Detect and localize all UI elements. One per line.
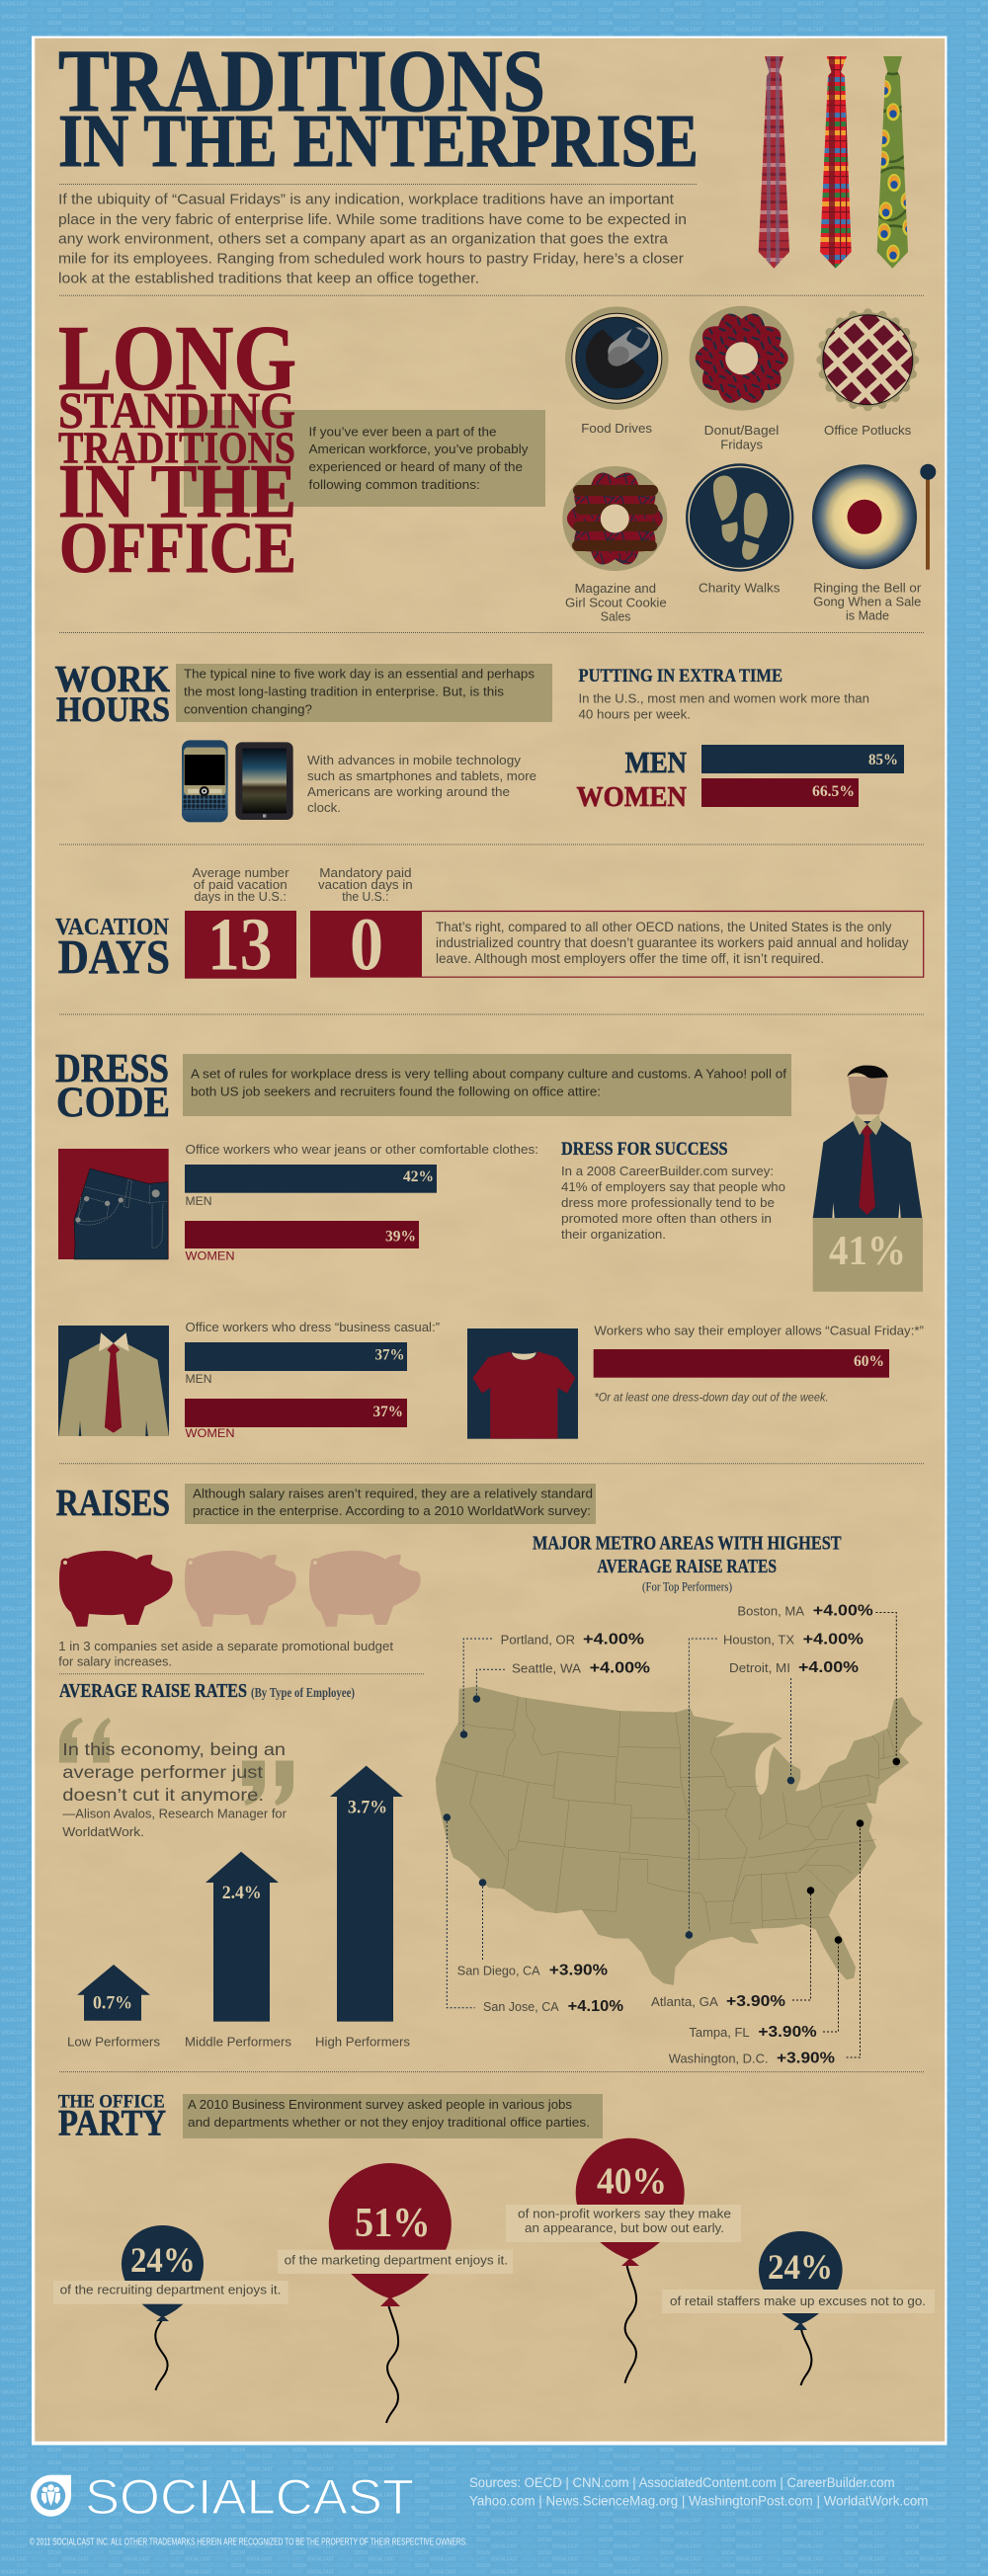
label: low performers: Low Performers <box>67 2035 160 2049</box>
caption: magazine and girl scout cookie sales: Sales <box>601 608 631 624</box>
intro text: If the ubiquity of “Casual Fridays” is any indication, workplace traditions have an important <box>58 192 675 207</box>
outlined vacation text <box>422 911 924 977</box>
heading: long standing traditions in the office: OFFICE <box>59 508 296 588</box>
heading: long standing traditions in the office <box>58 307 296 588</box>
map label: portland <box>501 1632 644 1648</box>
map label: detroit <box>729 1659 859 1676</box>
bar: women 66.5%: 66.5% <box>812 783 855 800</box>
bar: men 85% <box>701 745 904 773</box>
caption: average paid vacation days: Average number <box>192 865 289 880</box>
map label: boston: +4.00% <box>813 1602 873 1619</box>
map label: seattle: Seattle, WA <box>512 1662 582 1676</box>
label: women: WOMEN <box>186 1426 235 1440</box>
bar: women 37%: 37% <box>373 1404 403 1420</box>
stat box: 41% <box>813 1218 923 1292</box>
intro text <box>58 192 687 286</box>
socialcast logo icon <box>31 2475 71 2517</box>
icon: piggy bank faded <box>309 1551 421 1627</box>
map label: seattle <box>512 1660 650 1677</box>
map label: houston <box>723 1632 864 1648</box>
heading: major metro areas: MAJOR METRO AREAS WITH HIGHEST <box>533 1533 842 1555</box>
balloon: non-profit 40% <box>506 2138 741 2383</box>
caption: ringing the bell: is Made <box>846 608 889 623</box>
caption: magazine and girl scout cookie sales: Girl Scout Cookie <box>565 595 667 609</box>
map label: san diego <box>457 1963 608 1979</box>
map label: atlanta: +3.90% <box>726 1993 785 2010</box>
icon: piggy bank faded <box>185 1551 296 1627</box>
heading: major metro areas <box>533 1533 842 1594</box>
map label: washington: Washington, D.C. <box>669 2053 769 2066</box>
icon: gong <box>812 464 917 569</box>
intro text: look at the established traditions that keep an office together. <box>58 271 479 286</box>
icon: food drives can <box>565 306 669 410</box>
heading: work hours: WORK <box>55 659 170 700</box>
balloon: non-profit 40%: 40% <box>597 2161 667 2203</box>
bar: men 37% <box>185 1342 407 1371</box>
extra time text: In the U.S., most men and women work more than <box>579 691 869 706</box>
heading: raises: RAISES <box>56 1483 170 1524</box>
caption: mandatory paid vacation days <box>318 865 413 904</box>
heading: vacation days <box>55 914 170 984</box>
sources <box>469 2474 928 2509</box>
label: women: WOMEN <box>186 1248 235 1262</box>
icon: plaid red tie <box>759 56 789 269</box>
stat box: 0: 0 <box>350 904 383 987</box>
bar: men 37%: 37% <box>375 1347 405 1364</box>
title <box>58 33 699 183</box>
heading: dress code: DRESS <box>55 1045 169 1090</box>
jeans survey text: Office workers who wear jeans or other comfortable clothes: <box>186 1142 538 1157</box>
caption: office potlucks: Office Potlucks <box>824 423 912 438</box>
icon: t-shirt <box>467 1328 578 1439</box>
map label: detroit: +4.00% <box>798 1659 859 1676</box>
caption: mandatory paid vacation days: Mandatory paid <box>319 865 411 880</box>
heading: work hours <box>55 659 170 729</box>
balloon: marketing 51%: 51% <box>355 2201 431 2246</box>
work hours text box: The typical nine to five work day is an essential and perhaps <box>184 667 535 682</box>
bar: men 42% <box>185 1165 437 1193</box>
heading: putting in extra time: PUTTING IN EXTRA TIME <box>579 667 782 686</box>
map label: portland: Portland, OR <box>501 1634 575 1648</box>
map label: seattle: +4.00% <box>590 1660 650 1677</box>
arrow: high performers 3.7% <box>330 1766 403 2022</box>
balloon: recruiting 24% <box>53 2225 288 2390</box>
heading: dress code <box>55 1045 170 1126</box>
bar: casual friday 60%: 60% <box>854 1353 884 1370</box>
map label: atlanta <box>651 1993 785 2010</box>
heading: average raise rates: (By Type of Employee) <box>251 1686 355 1701</box>
dress for success text <box>561 1164 785 1242</box>
dress for success text: 41% of employers say that people who <box>561 1179 785 1194</box>
icon: tablet <box>235 742 293 820</box>
icon: peacock tie <box>877 56 908 269</box>
intro text: mile for its employees. Ranging from scheduled work hours to pastry Friday, here’s a closer <box>58 251 684 268</box>
long standing text box: American workforce, you’ve probably <box>308 442 529 456</box>
heading: vacation days: VACATION <box>55 914 169 940</box>
caption: donut bagel fridays: Fridays <box>720 437 763 451</box>
map label: portland: +4.00% <box>583 1632 644 1648</box>
long standing text box: If you’ve ever been a part of the <box>308 425 496 439</box>
work hours text box: the most long-lasting tradition in enterprise. But, is this <box>184 684 505 699</box>
label: middle performers: Middle Performers <box>185 2035 291 2049</box>
dress code text box: both US job seekers and recruiters found the following on office attire: <box>191 1085 601 1099</box>
mobile technology text: With advances in mobile technology <box>307 753 522 767</box>
arrow: middle performers 2.4%: 2.4% <box>222 1883 262 1903</box>
men label: MEN <box>625 746 687 779</box>
copyright: © 2011 SOCIALCAST INC. ALL OTHER TRADEMARKS HEREIN ARE RECOGNIZED TO BE THE PROPERTY OF THEIR RESPECTIVE OWNERS. <box>30 2537 467 2548</box>
outlined vacation text: That’s right, compared to all other OECD nations, the United States is the only <box>436 920 892 934</box>
map label: san jose <box>483 1998 623 2015</box>
heading: major metro areas: AVERAGE RAISE RATES <box>597 1556 777 1577</box>
intro text: place in the very fabric of enterprise life. While some traditions have come to be expected in <box>58 211 687 228</box>
outlined vacation text: leave. Although most employers offer the time off, it isn’t required. <box>436 951 824 966</box>
quote text <box>62 1739 287 1839</box>
mobile technology text: clock. <box>307 800 341 815</box>
dress for success text: their organization. <box>561 1227 666 1242</box>
sources: Yahoo.com | News.ScienceMag.org | WashingtonPost.com | WorldatWork.com <box>469 2493 928 2509</box>
icon: piggy bank highlighted <box>59 1551 173 1627</box>
caption: donut bagel fridays <box>704 423 779 451</box>
arrow: middle performers 2.4% <box>206 1852 279 2022</box>
heading: major metro areas: (For Top Performers) <box>642 1580 732 1594</box>
map label: boston <box>737 1602 873 1619</box>
quote text: average performer just <box>62 1762 263 1782</box>
icon: donut <box>690 306 794 411</box>
map label: atlanta: Atlanta, GA <box>651 1995 718 2009</box>
caption: ringing the bell: Gong When a Sale <box>813 595 921 609</box>
heading: dress code: CODE <box>56 1080 170 1126</box>
work hours text box: convention changing? <box>184 702 312 717</box>
long standing text box: experienced or heard of many of the <box>308 459 523 474</box>
label: men: MEN <box>186 1372 211 1386</box>
caption: average paid vacation days: days in the U.S.: <box>194 889 287 904</box>
label: high performers: High Performers <box>315 2035 410 2049</box>
heading: work hours: HOURS <box>56 689 170 729</box>
icon: footprints <box>686 463 793 572</box>
heading: long standing traditions in the office: TRADITIONS <box>58 423 295 472</box>
balloon: marketing 51%: of the marketing department enjoys it. <box>285 2253 508 2268</box>
title: IN THE ENTERPRISE <box>58 100 699 183</box>
map label: san diego: San Diego, CA <box>457 1965 540 1978</box>
label: men: MEN <box>186 1194 211 1208</box>
piggy bank caption: for salary increases. <box>58 1654 172 1668</box>
arrow: high performers 3.7%: 3.7% <box>348 1798 387 1817</box>
mobile technology text: Americans are working around the <box>307 784 510 799</box>
balloon: non-profit 40%: of non-profit workers say they make <box>518 2207 731 2221</box>
map label: boston: Boston, MA <box>737 1604 805 1618</box>
caption: ringing the bell <box>813 581 922 623</box>
casual friday text: Workers who say their employer allows “Casual Friday:*” <box>594 1324 924 1338</box>
office party text box: A 2010 Business Environment survey asked people in various jobs <box>188 2097 573 2112</box>
map label: tampa: Tampa, FL <box>689 2026 750 2040</box>
caption: average paid vacation days: of paid vacation <box>194 877 288 892</box>
balloon: retail 24%: of retail staffers make up excuses not to go. <box>670 2294 926 2308</box>
long standing text box <box>184 410 545 507</box>
heading: vacation days: DAYS <box>58 929 170 984</box>
arrow: low performers 0.7% <box>77 1965 150 2021</box>
heading: long standing traditions in the office: LONG <box>58 307 296 410</box>
icon: mallet <box>920 464 936 570</box>
bar: women 37% <box>185 1399 407 1427</box>
caption: donut bagel fridays: Donut/Bagel <box>704 423 779 438</box>
quote text: WorldatWork. <box>62 1825 144 1839</box>
heading: long standing traditions in the office: STANDING <box>58 383 295 440</box>
icon: smartphone <box>182 740 228 822</box>
caption: ringing the bell: Ringing the Bell or <box>813 581 922 595</box>
dress code text box: A set of rules for workplace dress is very telling about company culture and customs. A Yahoo! poll of <box>191 1067 786 1082</box>
icon: pie <box>820 312 915 407</box>
caption: food drives: Food Drives <box>581 421 653 436</box>
map: contiguous united states <box>436 1686 923 1985</box>
women label: WOMEN <box>577 781 687 813</box>
map label: tampa: +3.90% <box>758 2024 817 2041</box>
balloon: recruiting 24%: 24% <box>130 2240 196 2280</box>
dress for success text: In a 2008 CareerBuilder.com survey: <box>561 1164 774 1178</box>
bar: women 66.5% <box>701 778 859 807</box>
stat box: 13 <box>185 904 296 987</box>
icon: cookie <box>562 466 667 571</box>
leader lines and city dots <box>443 1612 900 2057</box>
raises text box: Although salary raises aren’t required, they are a relatively standard <box>193 1487 593 1500</box>
map label: washington: +3.90% <box>777 2051 835 2067</box>
extra time text: 40 hours per week. <box>579 707 691 722</box>
balloon: retail 24% <box>662 2231 935 2385</box>
piggy bank caption: 1 in 3 companies set aside a separate promotional budget <box>58 1640 394 1653</box>
quote text: —Alison Avalos, Research Manager for <box>62 1808 287 1821</box>
mobile technology text: such as smartphones and tablets, more <box>307 768 536 783</box>
icon: bright plaid tie <box>820 56 852 269</box>
arrow: low performers 0.7%: 0.7% <box>93 1993 132 2014</box>
map label: san jose: San Jose, CA <box>483 2000 559 2014</box>
caption: mandatory paid vacation days: vacation days in <box>318 877 413 892</box>
heading: long standing traditions in the office: IN THE <box>58 448 296 533</box>
office party text box <box>183 2094 603 2138</box>
sources: Sources: OECD | CNN.com | AssociatedContent.com | CareerBuilder.com <box>469 2474 895 2490</box>
caption: charity walks: Charity Walks <box>699 581 781 595</box>
caption: magazine and girl scout cookie sales <box>565 581 667 624</box>
map label: tampa <box>689 2024 817 2041</box>
stat box: 41%: 41% <box>829 1229 906 1274</box>
bar: casual friday 60% <box>594 1349 889 1378</box>
quote text: In this economy, being an <box>62 1739 286 1759</box>
map label: houston: +4.00% <box>803 1632 864 1648</box>
quotation marks <box>59 1718 293 1806</box>
map label: detroit: Detroit, MI <box>729 1661 790 1675</box>
balloon: recruiting 24%: of the recruiting department enjoys it. <box>60 2283 281 2297</box>
heading: the office party <box>58 2091 166 2144</box>
heading: the office party: PARTY <box>58 2104 166 2144</box>
caption: magazine and girl scout cookie sales: Magazine and <box>575 581 656 596</box>
outlined vacation text: industrialized country that doesn’t guarantee its workers paid annual and holiday <box>436 935 909 950</box>
caption: mandatory paid vacation days: the U.S.: <box>342 889 389 904</box>
extra time text <box>579 691 869 722</box>
heading: average raise rates: AVERAGE RAISE RATES <box>59 1680 247 1702</box>
mobile technology text <box>307 753 536 815</box>
bar: men 42%: 42% <box>403 1168 434 1185</box>
map label: washington <box>669 2051 835 2067</box>
dress code text box <box>183 1054 791 1116</box>
office party text box: and departments whether or not they enjoy traditional office parties. <box>188 2115 590 2130</box>
map label: san diego: +3.90% <box>549 1963 608 1979</box>
map label: houston: Houston, TX <box>723 1634 795 1648</box>
title: TRADITIONS <box>58 33 545 130</box>
bar: women 39%: 39% <box>385 1229 416 1246</box>
work hours text box <box>176 664 552 722</box>
dress for success text: dress more professionally tend to be <box>561 1195 775 1210</box>
raises text box <box>185 1484 596 1524</box>
footnote: *Or at least one dress-down day out of the week. <box>595 1393 828 1405</box>
raises text box: practice in the enterprise. According to a 2010 WorldatWork survey: <box>193 1504 591 1518</box>
icon: businessman <box>813 1066 922 1218</box>
bar: men 85%: 85% <box>868 752 898 768</box>
piggy bank caption <box>58 1640 394 1668</box>
heading: dress for success: DRESS FOR SUCCESS <box>561 1140 728 1160</box>
stat box: 0 <box>310 904 422 987</box>
caption: average paid vacation days <box>192 865 289 904</box>
balloon: retail 24%: 24% <box>768 2247 833 2287</box>
quote text: doesn’t cut it anymore. <box>62 1785 264 1805</box>
intro text: any work environment, others set a company apart as an organization that goes the extra <box>58 231 669 248</box>
long standing text box: following common traditions: <box>308 477 480 492</box>
icon: business casual jacket <box>58 1326 169 1436</box>
icon: jeans <box>58 1149 169 1259</box>
balloon: marketing 51% <box>278 2163 513 2423</box>
dress for success text: promoted more often than others in <box>561 1211 772 1226</box>
business casual text: Office workers who dress “business casual:” <box>186 1320 440 1334</box>
bar: women 39% <box>185 1221 419 1248</box>
heading: the office party: THE OFFICE <box>58 2091 165 2112</box>
stat box: 13: 13 <box>207 904 273 987</box>
socialcast wordmark: SOCIALCAST <box>85 2469 414 2525</box>
map label: san jose: +4.10% <box>568 1998 623 2015</box>
balloon: non-profit 40%: an appearance, but bow out early. <box>525 2220 724 2235</box>
